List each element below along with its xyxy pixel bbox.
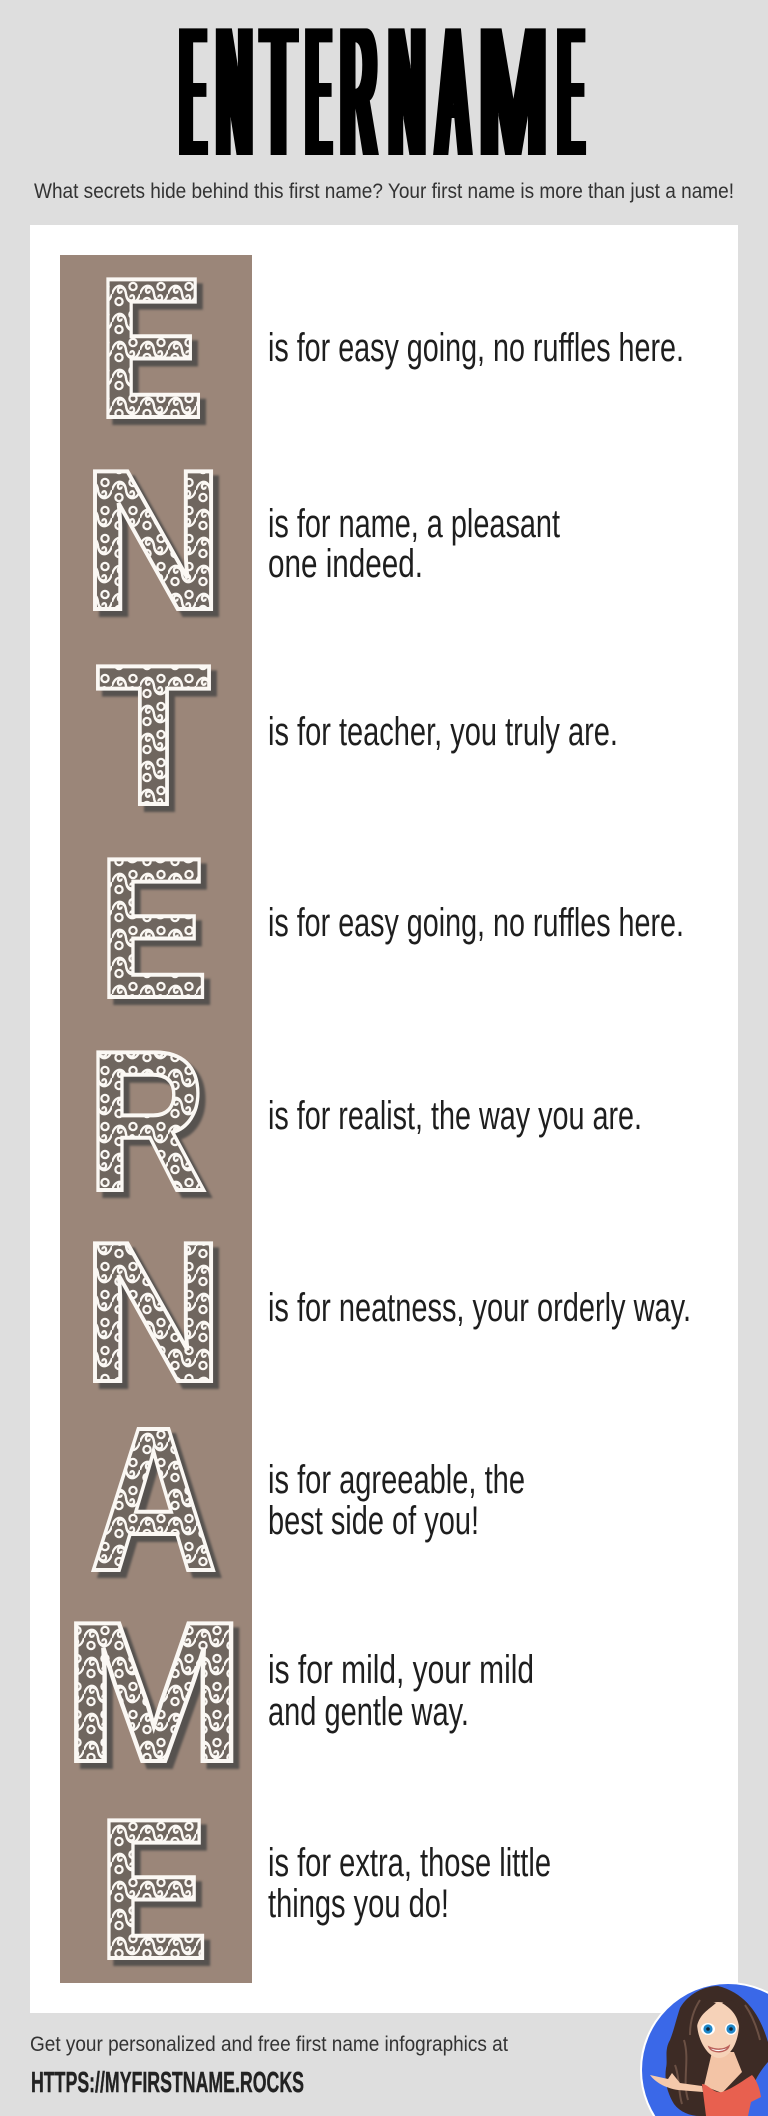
letter R: R (87, 1010, 207, 1233)
letter M: M (62, 1581, 246, 1804)
letter A: A (89, 1385, 218, 1614)
text: T line: is for teacher, you truly are. (268, 710, 618, 754)
letter T: T (96, 624, 211, 847)
footer url: HTTPS://MYFIRSTNAME.ROCKS (31, 2067, 304, 2099)
footer invitation text: Get your personalized and free first name infographics at (30, 2033, 508, 2056)
text: A lines (268, 1458, 525, 1543)
text: A lines: is for agreeable, the (268, 1458, 525, 1502)
text: M lines: is for mild, your mild (268, 1648, 534, 1692)
icon: avatar (640, 1980, 768, 2116)
text: E lines: things you do! (268, 1882, 449, 1926)
text: N lines (268, 502, 560, 586)
panel: white content card (30, 225, 738, 2013)
title (182, 0, 582, 194)
letter N: N (82, 1201, 224, 1424)
letter E: E (98, 1778, 209, 2001)
panel: brown letter column (60, 255, 252, 1983)
text: A lines: best side of you! (268, 1499, 479, 1543)
text: E lines: is for extra, those little (268, 1841, 551, 1885)
letter E: E (98, 817, 209, 1040)
text: M lines (268, 1648, 534, 1734)
letter E: E (97, 237, 205, 460)
text: M lines: and gentle way. (268, 1690, 469, 1734)
text: N lines: is for name, a pleasant (268, 502, 560, 546)
text: E lines (268, 1841, 551, 1926)
letter N: N (82, 429, 224, 652)
text: N lines: one indeed. (268, 542, 423, 586)
